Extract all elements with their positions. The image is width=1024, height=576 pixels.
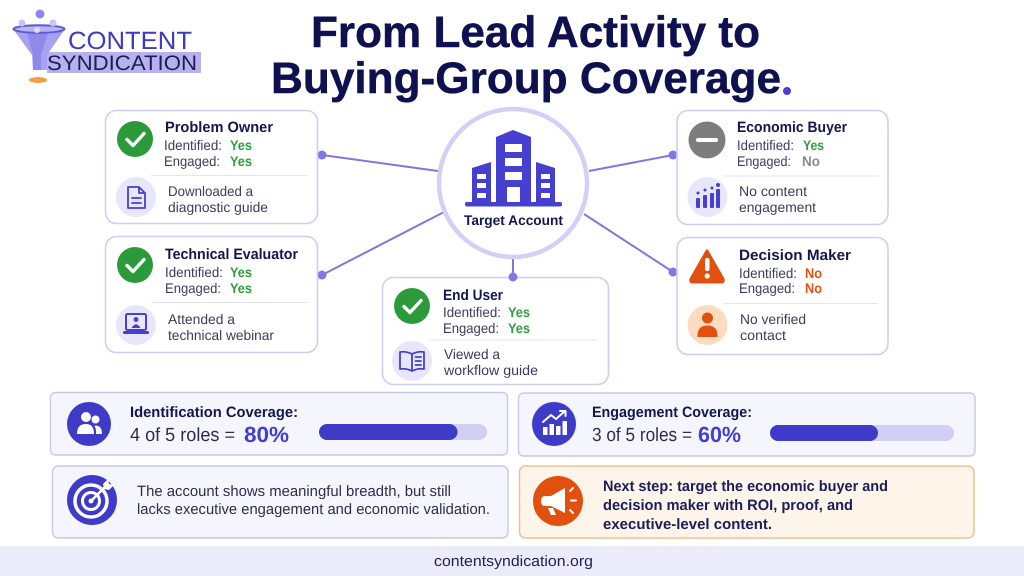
card: Decision Maker [677, 238, 888, 354]
progress bar: 80% [319, 424, 487, 440]
card: End User: Viewed a [444, 346, 500, 362]
panel: insight: lacks executive engagement and economic validation. [137, 501, 490, 518]
progress bar: 60% [770, 425, 954, 441]
card: Technical Evaluator: Identified: [165, 264, 223, 280]
card: Decision Maker: contact [740, 327, 786, 343]
icon: megaphone [533, 476, 583, 526]
card: Economic Buyer: Identified: [737, 137, 794, 153]
card: End User: Engaged: [443, 320, 499, 336]
icon: rising chart [532, 402, 576, 446]
card: Economic Buyer: Engaged: [737, 153, 791, 169]
card: End User: Identified: [443, 304, 501, 320]
icon: open book [392, 341, 432, 381]
card: Problem Owner: Engaged: [164, 153, 220, 169]
panel: Engagement Coverage: Engagement Coverage: [592, 404, 752, 421]
icon: person [688, 305, 728, 345]
icon: people [67, 402, 111, 446]
panel: next step: executive-level content. [603, 516, 772, 533]
icon: target [67, 475, 117, 525]
icon: green check [117, 121, 153, 157]
panel: Identification Coverage [50, 392, 508, 455]
card: Problem Owner: Yes [230, 137, 252, 153]
card: End User: End User [443, 287, 503, 304]
card: End User [382, 272, 608, 384]
icon: green check [394, 288, 430, 324]
card: Problem Owner: Downloaded a [168, 183, 253, 199]
card: Decision Maker: Decision Maker [739, 247, 851, 264]
card: Problem Owner: diagnostic guide [168, 199, 268, 215]
hub: Target Account [439, 109, 587, 257]
footer: contentsyndication.org [434, 553, 593, 570]
card: Economic Buyer: Yes [803, 137, 824, 153]
card: Technical Evaluator: Attended a [168, 311, 235, 327]
title [271, 8, 791, 103]
card: Decision Maker: No [805, 280, 822, 296]
panel: insight [52, 466, 508, 538]
card: Technical Evaluator: technical webinar [168, 327, 274, 343]
panel: Identification Coverage: 80% [244, 422, 289, 447]
icon: green check [117, 247, 153, 283]
card: Problem Owner: Problem Owner [165, 119, 273, 136]
panel: Identification Coverage: 4 of 5 roles = [130, 425, 235, 446]
card: Technical Evaluator: Engaged: [165, 280, 221, 296]
card: Economic Buyer: Economic Buyer [737, 119, 847, 136]
hub: Target Account: Target Account [464, 212, 563, 228]
panel: next step: decision maker with ROI, proof, and [603, 497, 853, 514]
card: Decision Maker: No [805, 265, 822, 281]
logo: Content Syndication [13, 10, 201, 83]
card: End User: workflow guide [443, 362, 538, 378]
card: Technical Evaluator: Yes [230, 264, 252, 280]
card: End User: Yes [508, 304, 530, 320]
icon: bar chart [688, 177, 728, 217]
card: Technical Evaluator [106, 236, 318, 352]
card: End User: Yes [508, 320, 530, 336]
card: Economic Buyer: No content [739, 183, 807, 199]
icon: office buildings [465, 130, 562, 206]
panel: next step: Next step: target the economic buyer and [603, 478, 888, 495]
panel: next step [520, 466, 974, 538]
icon: grey minus [688, 122, 726, 158]
card: Decision Maker: Engaged: [739, 280, 795, 296]
card: Decision Maker: Identified: [739, 265, 797, 281]
panel: Identification Coverage: Identification Coverage: [130, 404, 298, 421]
panel: Engagement Coverage [518, 393, 975, 456]
card: Economic Buyer [677, 110, 888, 224]
logo: Content Syndication: SYNDICATION [47, 52, 197, 75]
card: Economic Buyer: No [802, 153, 820, 169]
panel: insight: The account shows meaningful breadth, but still [137, 483, 451, 500]
panel: Engagement Coverage: 3 of 5 roles = [592, 425, 692, 446]
card: Decision Maker: No verified [740, 311, 806, 327]
panel: Engagement Coverage: 60% [698, 422, 741, 447]
card: Technical Evaluator: Yes [230, 280, 252, 296]
title: Buying-Group Coverage [271, 54, 781, 103]
icon: document [116, 177, 156, 217]
icon: webinar laptop [116, 305, 156, 345]
card: Problem Owner: Yes [230, 153, 252, 169]
card: Problem Owner: Identified: [164, 137, 222, 153]
footer [0, 546, 1024, 576]
card: Economic Buyer: engagement [739, 199, 816, 215]
card: Problem Owner [106, 110, 318, 224]
logo: Content Syndication: CONTENT [68, 27, 192, 55]
title: From Lead Activity to [311, 8, 760, 57]
card: Technical Evaluator: Technical Evaluator [165, 246, 298, 263]
connector lines [318, 150, 678, 280]
icon: warning triangle [691, 251, 723, 282]
